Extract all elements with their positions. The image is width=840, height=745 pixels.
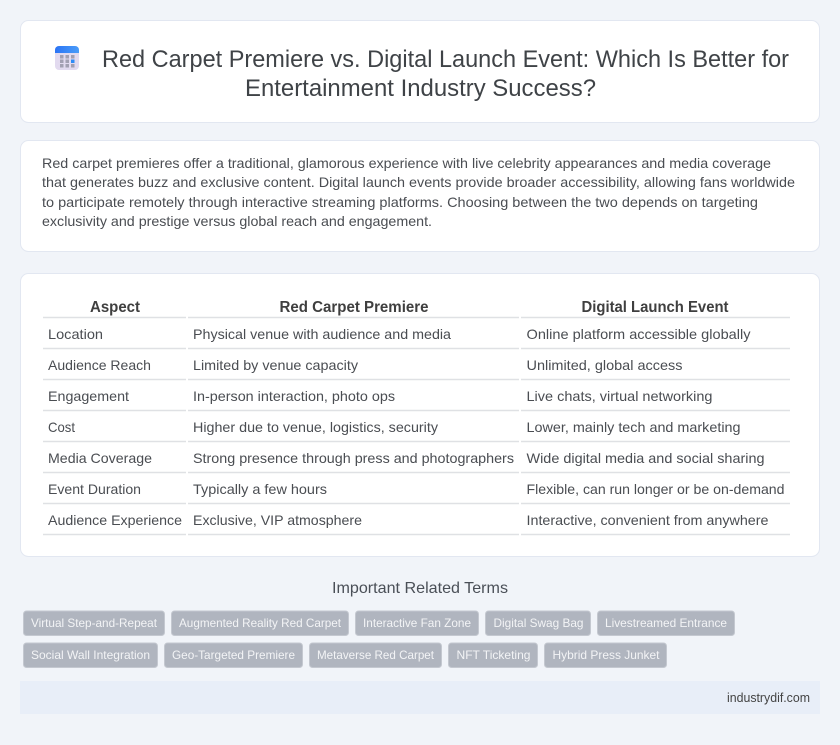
table header: Red Carpet Premiere bbox=[280, 299, 429, 316]
tags row 2: NFT Ticketing bbox=[456, 648, 530, 662]
column: digital launch event: Interactive, convenient from anywhere bbox=[526, 512, 769, 528]
column: aspect: Audience Reach bbox=[48, 357, 151, 373]
tags row 1: Interactive Fan Zone bbox=[363, 616, 471, 630]
tags row 1: Livestreamed Entrance bbox=[605, 616, 727, 630]
tags row 2: Social Wall Integration bbox=[31, 648, 150, 662]
panel: introduction bbox=[20, 140, 820, 252]
intro text bbox=[42, 155, 795, 229]
column: red carpet premiere bbox=[193, 326, 514, 528]
column: digital launch event: Online platform accessible globally bbox=[526, 326, 750, 342]
tags row 2: Geo-Targeted Premiere bbox=[172, 648, 295, 662]
column: aspect: Audience Experience bbox=[48, 512, 182, 528]
column: aspect: Location bbox=[48, 326, 103, 342]
title: Red Carpet Premiere vs. Digital Launch Event: Which Is Better for bbox=[102, 46, 789, 73]
intro text: Red carpet premieres offer a traditional, glamorous experience with live celebrity appearances and media coverage bbox=[42, 155, 771, 171]
panel: comparison table bbox=[20, 274, 820, 556]
table header: Aspect bbox=[90, 299, 141, 316]
column: digital launch event bbox=[526, 326, 784, 528]
column: aspect bbox=[48, 326, 182, 528]
tags row 2 bbox=[24, 643, 666, 668]
column: red carpet premiere: Limited by venue capacity bbox=[193, 357, 358, 373]
footer bbox=[20, 681, 820, 714]
tags row 2: Metaverse Red Carpet bbox=[317, 648, 435, 662]
table header: Digital Launch Event bbox=[582, 299, 729, 316]
table grid lines bbox=[43, 318, 790, 534]
column: digital launch event: Wide digital media and social sharing bbox=[526, 450, 764, 466]
column: red carpet premiere: Strong presence through press and photographers bbox=[193, 450, 514, 466]
table header bbox=[90, 299, 729, 316]
column: digital launch event: Flexible, can run longer or be on-demand bbox=[526, 481, 784, 497]
column: digital launch event: Lower, mainly tech and marketing bbox=[526, 419, 740, 435]
column: aspect: Cost bbox=[48, 419, 75, 435]
column: red carpet premiere: Exclusive, VIP atmosphere bbox=[193, 512, 362, 528]
column: red carpet premiere: Typically a few hours bbox=[193, 481, 327, 497]
title: Entertainment Industry Success? bbox=[245, 75, 596, 102]
column: red carpet premiere: Higher due to venue, logistics, security bbox=[193, 419, 438, 435]
tags row 1: Augmented Reality Red Carpet bbox=[179, 616, 342, 630]
column: red carpet premiere: Physical venue with audience and media bbox=[193, 326, 451, 342]
tags row 1: Digital Swag Bag bbox=[494, 616, 584, 630]
heading: related terms: Important Related Terms bbox=[332, 580, 508, 597]
title bbox=[102, 46, 789, 102]
footer: industrydif.com bbox=[727, 691, 810, 705]
column: digital launch event: Unlimited, global access bbox=[526, 357, 682, 373]
panel: header bbox=[20, 20, 820, 122]
column: aspect: Event Duration bbox=[48, 481, 141, 497]
tags row 2: Hybrid Press Junket bbox=[552, 648, 660, 662]
column: aspect: Engagement bbox=[48, 388, 129, 404]
intro text: to participate remotely through interactive streaming platforms. Choosing between the two depends on targeting bbox=[42, 194, 758, 210]
tags row 1: Virtual Step-and-Repeat bbox=[31, 616, 158, 630]
intro text: that generates buzz and exclusive content. Digital launch events provide broader accessibility, allowing fans worldwide bbox=[42, 174, 795, 190]
intro text: exclusivity and prestige versus global reach and engagement. bbox=[42, 213, 432, 229]
column: digital launch event: Live chats, virtual networking bbox=[526, 388, 712, 404]
tags row 1 bbox=[24, 611, 734, 636]
icon: calendar bbox=[55, 46, 79, 70]
column: aspect: Media Coverage bbox=[48, 450, 152, 466]
column: red carpet premiere: In-person interaction, photo ops bbox=[193, 388, 395, 404]
